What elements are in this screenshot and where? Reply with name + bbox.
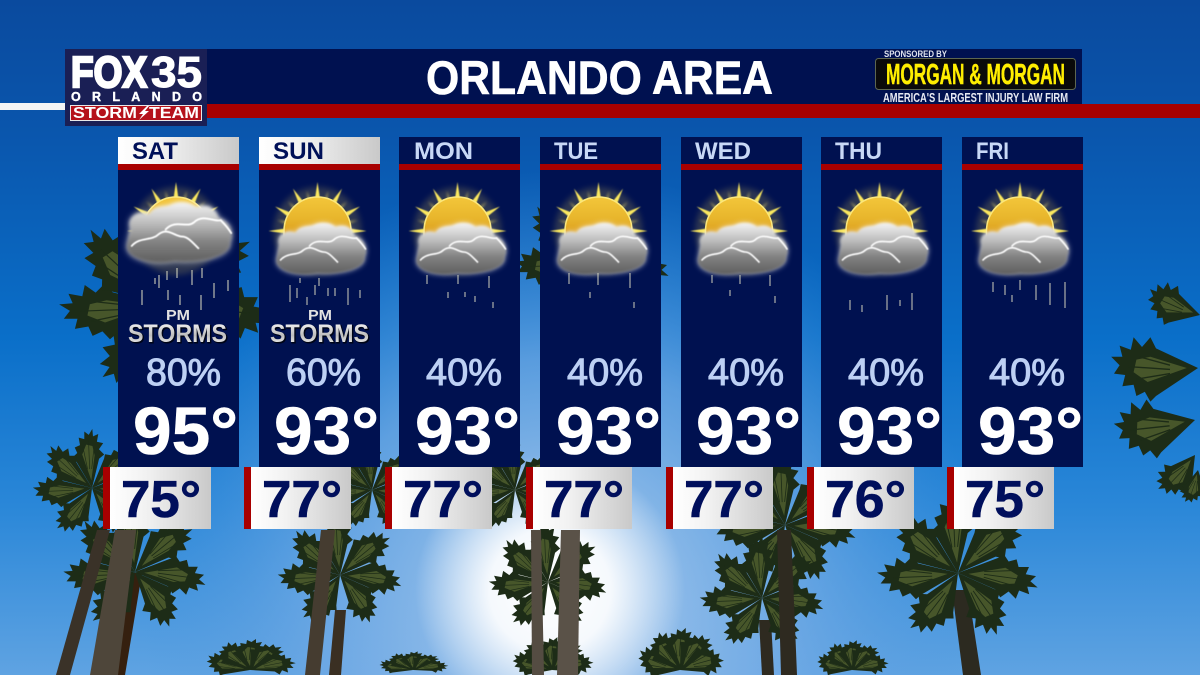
rain chance: 40% [567,352,643,394]
icon: sun and clouds [408,182,506,308]
red divider [259,164,380,170]
title banner [207,49,1082,104]
panel: Wednesday [666,137,802,529]
title: ORLANDO AREA [426,51,773,104]
condition: PM storms: STORMS [128,320,227,348]
condition: PM storms: STORMS [271,321,370,349]
high temp: 95° [133,394,238,469]
background: palm trees [32,183,1200,675]
sponsor: Morgan & Morgan: MORGAN & MORGAN [886,59,1065,91]
low temp [103,467,211,529]
day header: SUN [273,138,324,165]
panel: Thursday [807,137,942,529]
low temp: 75° [965,471,1045,529]
sponsor: Morgan & Morgan: AMERICA'S LARGEST INJURY LAW FIRM [883,91,1068,105]
high temp: 93° [696,394,801,469]
low temp: 76° [825,471,906,529]
day header: THU [835,138,882,165]
condition: PM storms: STORMS [270,320,369,348]
high temp: 93° [978,394,1083,469]
logo: FOX 35 Orlando Storm Team: TEAM [149,105,199,122]
icon: storm clouds with sun [127,182,232,310]
red divider [118,164,239,170]
sponsor: Morgan & Morgan [876,49,1076,105]
logo: FOX 35 Orlando Storm Team: 35 [151,48,202,97]
red divider [821,164,942,170]
condition: PM storms [270,307,370,349]
rain chance: 40% [426,352,502,394]
condition: PM storms [128,307,228,349]
icon: sun and storm clouds [268,182,366,305]
day header [118,137,239,165]
panel: Friday [947,137,1083,529]
day header: MON [414,138,473,165]
high temp: 93° [274,394,379,469]
day header: FRI [976,138,1009,165]
low temp: 77° [544,471,624,529]
logo: FOX 35 Orlando Storm Team: FOX [71,48,147,97]
low temp [526,467,632,529]
low temp: 77° [684,471,764,529]
sponsor: Morgan & Morgan: SPONSORED BY [884,49,947,59]
panel: Sunday [244,137,380,529]
rain chance: 40% [708,352,784,394]
high temp: 93° [837,394,942,469]
panel: Monday [385,137,520,529]
day header: WED [695,138,751,165]
condition: PM storms: STORMS [129,321,228,349]
icon: sun and clouds [830,182,928,312]
panel: Tuesday [526,137,661,529]
low temp: 77° [403,471,483,529]
low temp [947,467,1054,529]
rain chance: 60% [286,352,361,394]
condition: PM storms: PM [166,307,190,324]
red banner stripe [207,104,1200,118]
panel: Saturday [103,137,239,529]
rain chance: 40% [848,352,924,394]
day header [259,137,380,165]
red divider [540,164,661,170]
rain chance: 80% [146,352,221,394]
low temp [807,467,914,529]
low temp: 77° [262,471,342,529]
red divider [399,164,520,170]
icon: sun and clouds [690,182,788,303]
low temp [244,467,351,529]
day header: SAT [132,138,178,165]
low temp: 75° [121,471,201,529]
high temp: 93° [415,394,520,469]
icon: sun and clouds [550,182,648,308]
icon: sun and clouds [971,182,1069,308]
logo: FOX 35 Orlando Storm Team: STORM [73,105,137,122]
rain chance: 40% [989,352,1065,394]
white accent line [0,103,66,110]
logo: FOX 35 Orlando Storm Team: ORLANDO [71,90,202,104]
day header: TUE [554,138,598,165]
red divider [681,164,802,170]
low temp [385,467,492,529]
red divider [962,164,1083,170]
low temp [666,467,773,529]
high temp: 93° [556,394,661,469]
logo: FOX 35 Orlando Storm Team [65,48,207,126]
condition: PM storms: PM [308,307,332,324]
